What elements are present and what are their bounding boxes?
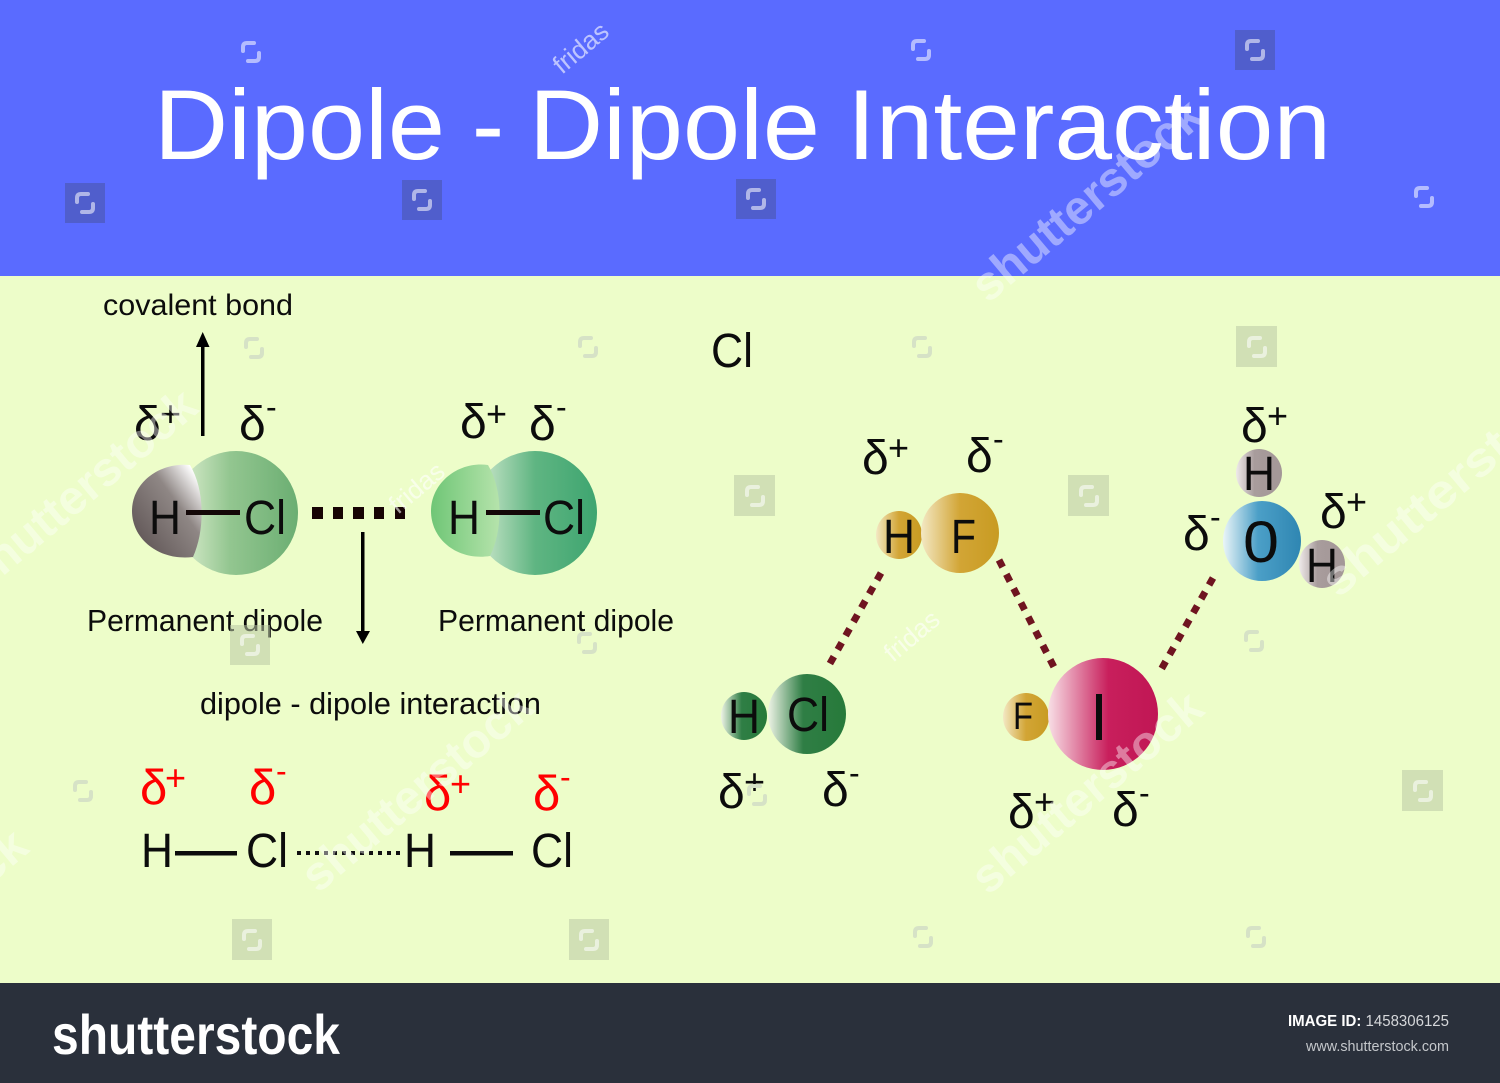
red charges: δ <box>249 761 276 815</box>
website: www.shutterstock.com <box>1305 1038 1449 1055</box>
formula: H-Cl...H-Cl with red charges: H <box>404 825 436 878</box>
formula: H-Cl...H-Cl with red charges: H <box>141 825 173 878</box>
right panel: molecule chain <box>718 395 1367 839</box>
red charges: - <box>276 753 287 789</box>
covalent bond label: covalent bond <box>103 289 293 322</box>
charges: first HCl: δ <box>134 398 161 451</box>
footer bar <box>0 983 1500 1083</box>
shutterstock logo: shutterstock <box>52 1003 341 1066</box>
charges: HCl: + <box>744 761 765 802</box>
charges: H2O: δ <box>1241 400 1268 453</box>
molecule: second HCl <box>431 451 597 575</box>
charges: second HCl <box>460 389 567 451</box>
arrow: interaction down <box>356 532 370 644</box>
charges: first HCl: + <box>160 393 181 434</box>
charges: HF: δ <box>966 430 993 483</box>
molecule: second HCl: H <box>448 492 480 545</box>
molecule: second HCl: Cl <box>543 492 585 545</box>
molecule: H2O: H <box>1306 540 1338 593</box>
charges: second HCl: + <box>486 393 507 434</box>
charges: first HCl <box>134 389 277 451</box>
charges: HCl: - <box>849 755 860 791</box>
charges: FI: δ <box>1112 784 1139 837</box>
molecule: H2O: 0 <box>1243 510 1279 575</box>
arrow: covalent bond up <box>196 332 210 436</box>
charges: H2O: + <box>1267 395 1288 436</box>
molecule: HF: H <box>883 511 915 564</box>
charges: first HCl: - <box>266 389 277 425</box>
image id: IMAGE ID: 1458306125 <box>1288 1013 1449 1030</box>
charges: second HCl: δ <box>460 396 487 449</box>
charges: FI: δ <box>1008 786 1035 839</box>
charges: second HCl: δ <box>529 398 556 451</box>
molecule: FI <box>1003 658 1158 770</box>
charges: HF: δ <box>862 432 889 485</box>
red charges: - <box>560 759 571 795</box>
title: - <box>472 69 504 180</box>
dotted links <box>828 560 1213 675</box>
molecule: H2O <box>1223 448 1345 593</box>
watermarks: fridas <box>878 604 946 668</box>
red charges: δ <box>140 761 167 815</box>
charges: FI: - <box>1139 775 1150 811</box>
charges: second HCl: - <box>556 389 567 425</box>
watermarks: shutterstock <box>291 678 544 902</box>
red charges: + <box>450 763 471 804</box>
watermarks: shutterstock <box>961 680 1214 904</box>
molecule: first HCl: H <box>149 492 181 545</box>
formula: H-Cl...H-Cl with red charges <box>140 753 573 878</box>
charges: HCl: δ <box>718 766 745 819</box>
molecule: first HCl <box>132 451 298 575</box>
charges: H2O: δ <box>1320 486 1347 539</box>
charges: HF <box>862 421 1004 485</box>
formula: H-Cl...H-Cl with red charges: Cl <box>531 825 573 878</box>
left panel: HCl dipole diagram <box>87 289 674 721</box>
charges: H2O: δ <box>1183 508 1210 561</box>
charges: HCl <box>718 755 860 819</box>
charges: H2O: - <box>1210 499 1221 535</box>
charges: HF: + <box>888 427 909 468</box>
dotted interaction line <box>312 507 405 519</box>
charges: HCl: δ <box>822 764 849 817</box>
molecule: H2O: H <box>1243 448 1275 501</box>
red charges: δ <box>533 767 560 821</box>
title: Dipole <box>154 69 445 180</box>
watermarks: fridas <box>383 456 451 520</box>
molecule: HCl <box>721 674 846 754</box>
title: Dipole <box>529 69 820 180</box>
charges: H2O <box>1183 395 1367 561</box>
red charges <box>140 753 571 821</box>
molecule: HCl: Cl <box>787 689 829 742</box>
watermarks: shutterst <box>1311 419 1500 607</box>
molecule: HF: F <box>951 511 976 564</box>
charges: first HCl: δ <box>239 398 266 451</box>
watermarks: fridas <box>547 16 615 80</box>
watermarks: shutterstock <box>961 88 1214 312</box>
molecule: first HCl: Cl <box>244 492 286 545</box>
charges: FI: + <box>1034 781 1055 822</box>
title <box>154 69 1331 180</box>
label: dipole-dipole interaction: dipole - dipole interaction <box>200 686 541 721</box>
red charges: + <box>165 757 186 798</box>
molecule: FI: F <box>1013 696 1033 738</box>
formula: H-Cl...H-Cl with red charges: Cl <box>246 825 288 878</box>
stray Cl label: Cl <box>711 325 753 378</box>
molecule: HF <box>876 493 999 573</box>
charges: H2O: + <box>1346 481 1367 522</box>
title banner <box>0 0 1500 276</box>
red charges: δ <box>424 767 451 821</box>
title: Interaction <box>847 69 1331 180</box>
charges: FI <box>1008 775 1150 839</box>
label: permanent dipole left: Permanent dipole <box>87 603 323 638</box>
charges: HF: - <box>993 421 1004 457</box>
label: permanent dipole right: Permanent dipole <box>438 603 674 638</box>
molecule: HCl: H <box>728 691 760 744</box>
